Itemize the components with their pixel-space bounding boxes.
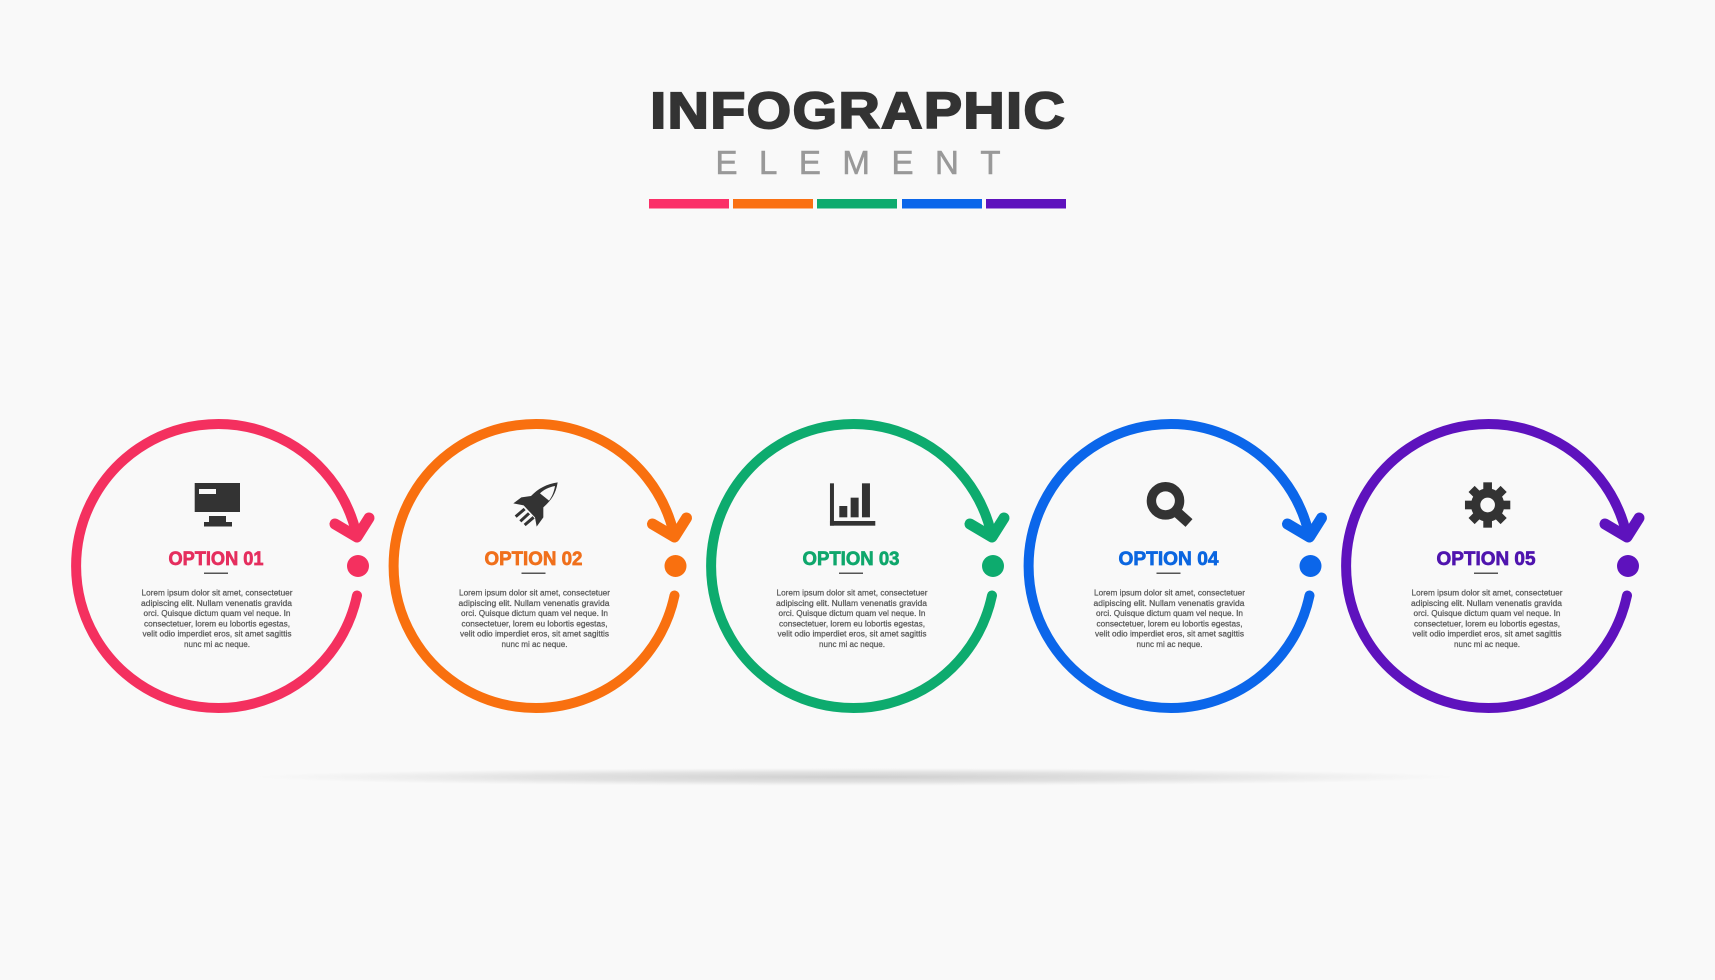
heading 05: OPTION 05: [1436, 548, 1536, 570]
icon: gear: [1465, 482, 1510, 528]
text block 02: consectetuer, lorem eu lobortis egestas,: [462, 618, 608, 628]
divider 02: [522, 572, 546, 574]
text block 05: velit odio imperdiet eros, sit amet sagittis: [1412, 629, 1562, 639]
text block 03: nunc mi ac neque.: [819, 639, 885, 649]
text block 02: nunc mi ac neque.: [502, 639, 568, 649]
text block 04: orci. Quisque dictum quam vel neque. In: [1096, 608, 1243, 618]
text block 01: consectetuer, lorem eu lobortis egestas,: [144, 618, 290, 628]
dot 01: [347, 555, 369, 577]
text block 03: velit odio imperdiet eros, sit amet sagittis: [778, 629, 926, 639]
text block 05: [1411, 588, 1563, 649]
text block 03: adipiscing elit. Nullam venenatis gravida: [776, 598, 927, 608]
heading 01: OPTION 01: [168, 548, 264, 570]
panel: option 01: [76, 424, 369, 708]
text block 05: consectetuer, lorem eu lobortis egestas,: [1414, 618, 1560, 628]
text block 02: [458, 588, 610, 649]
text block 01: [141, 588, 293, 649]
panel: option 04: [1029, 424, 1322, 708]
icon: bar chart: [830, 483, 875, 526]
divider 03: [839, 572, 863, 574]
dot 02: [664, 555, 686, 577]
text block 01: Lorem ipsum dolor sit amet, consectetuer: [142, 588, 293, 598]
text block 02: orci. Quisque dictum quam vel neque. In: [461, 608, 608, 618]
title: INFOGRAPHIC: [650, 83, 1065, 139]
colour bar legend: [649, 199, 1066, 208]
text block 04: Lorem ipsum dolor sit amet, consectetuer: [1094, 588, 1245, 598]
text block 01: nunc mi ac neque.: [184, 639, 250, 649]
divider 05: [1474, 572, 1498, 574]
panel: option 03: [711, 424, 1004, 708]
text block 02: velit odio imperdiet eros, sit amet sagittis: [460, 629, 609, 639]
subtitle: ELEMENT: [716, 144, 1000, 181]
icon: magnifier: [1151, 487, 1189, 523]
text block 04: velit odio imperdiet eros, sit amet sagittis: [1095, 629, 1244, 639]
text block 02: Lorem ipsum dolor sit amet, consectetuer: [459, 588, 610, 598]
circular arrow 01: [76, 424, 369, 708]
panel: option 02: [394, 424, 686, 708]
panel: option 05: [1346, 424, 1639, 708]
text block 01: velit odio imperdiet eros, sit amet sagittis: [142, 629, 292, 639]
text block 01: orci. Quisque dictum quam vel neque. In: [144, 608, 291, 618]
circular arrow 05: [1346, 424, 1639, 708]
dot 04: [1300, 555, 1322, 577]
icon: rocket: [513, 482, 558, 527]
text block 05: nunc mi ac neque.: [1454, 639, 1520, 649]
text block 05: Lorem ipsum dolor sit amet, consectetuer: [1412, 588, 1563, 598]
text block 05: orci. Quisque dictum quam vel neque. In: [1414, 608, 1561, 618]
dot 05: [1617, 555, 1639, 577]
text block 04: nunc mi ac neque.: [1136, 639, 1202, 649]
text block 03: consectetuer, lorem eu lobortis egestas,: [779, 618, 925, 628]
text block 03: [776, 588, 928, 649]
icon: monitor: [195, 483, 240, 526]
text block 04: [1094, 588, 1245, 649]
circular arrow 04: [1029, 424, 1322, 708]
text block 02: adipiscing elit. Nullam venenatis gravida: [458, 598, 610, 608]
floor shadow: [256, 768, 1456, 786]
heading 03: OPTION 03: [802, 548, 900, 570]
divider 01: [204, 572, 228, 574]
text block 04: adipiscing elit. Nullam venenatis gravida: [1094, 598, 1245, 608]
heading 04: OPTION 04: [1118, 548, 1219, 570]
heading 02: OPTION 02: [484, 548, 583, 570]
circular arrow 02: [394, 424, 686, 708]
text block 03: Lorem ipsum dolor sit amet, consectetuer: [776, 588, 928, 598]
divider 04: [1156, 572, 1180, 574]
circular arrow 03: [711, 424, 1004, 708]
text block 05: adipiscing elit. Nullam venenatis gravida: [1411, 598, 1562, 608]
text block 01: adipiscing elit. Nullam venenatis gravida: [141, 598, 292, 608]
text block 04: consectetuer, lorem eu lobortis egestas,: [1096, 618, 1242, 628]
dot 03: [982, 555, 1004, 577]
text block 03: orci. Quisque dictum quam vel neque. In: [778, 608, 926, 618]
